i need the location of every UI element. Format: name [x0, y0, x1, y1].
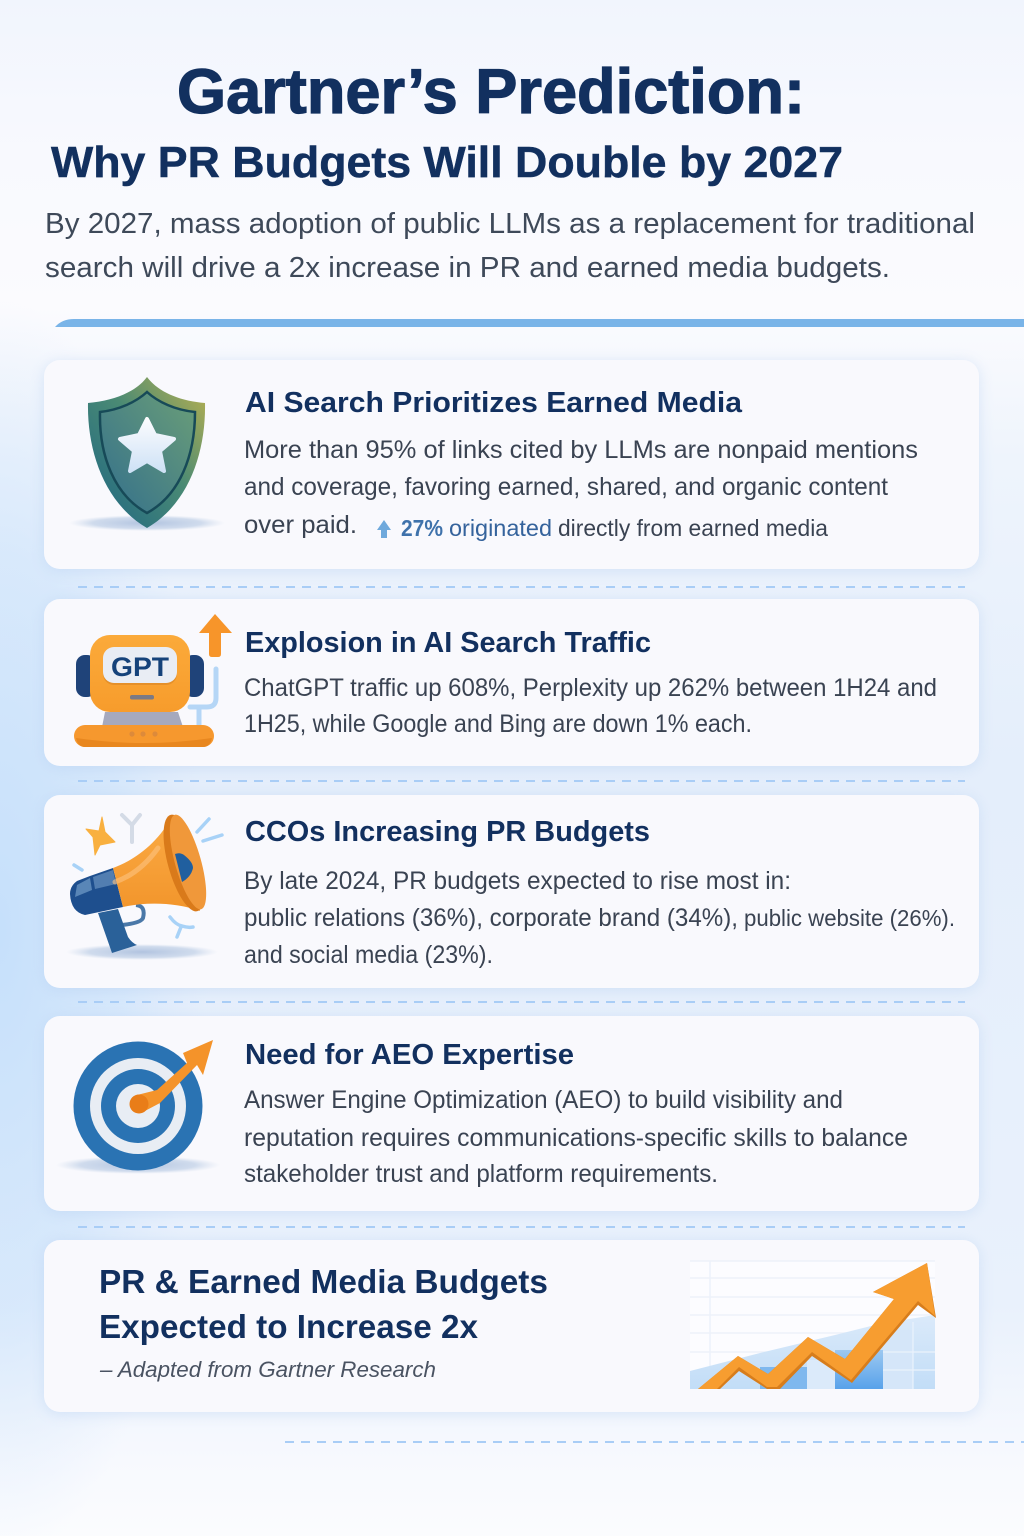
icon: GPT computer with up arrow — [74, 614, 232, 747]
icon: small up arrow — [377, 520, 391, 538]
body text — [244, 674, 937, 738]
statistic callout: 27% — [401, 515, 443, 541]
source attribution: – Adapted from Gartner Research — [99, 1357, 436, 1382]
icon: megaphone — [66, 811, 222, 960]
icon: target with arrow — [56, 1040, 220, 1174]
body text: stakeholder trust and platform requirements. — [244, 1160, 718, 1188]
card shadows — [44, 362, 979, 1414]
body text: public relations (36%), corporate brand (34%), — [244, 904, 738, 932]
blue header rule — [55, 319, 1024, 327]
dashed separators — [78, 587, 1024, 1442]
statistic callout: directly from earned media — [558, 515, 828, 541]
heading: Explosion in AI Search Traffic — [245, 627, 651, 659]
body text: More than 95% of links cited by LLMs are nonpaid mentions — [244, 436, 918, 464]
body text — [244, 1086, 908, 1188]
body text: and social media (23%). — [244, 941, 493, 969]
icon: shield with star — [69, 377, 225, 531]
panel: need for AEO expertise — [44, 1016, 979, 1211]
body text: 1H25, while Google and Bing are down 1% each. — [244, 710, 752, 738]
body text: public website (26%). — [744, 905, 955, 931]
heading: AI Search Prioritizes Earned Media — [245, 387, 743, 419]
panel: explosion in AI search traffic — [44, 599, 979, 766]
title: Gartner’s Prediction: — [177, 57, 805, 127]
panel: conclusion — [44, 1240, 979, 1412]
intro text: search will drive a 2x increase in PR and earned media budgets. — [45, 252, 890, 284]
body text — [244, 436, 918, 539]
body text: Answer Engine Optimization (AEO) to build visibility and — [244, 1086, 843, 1114]
panel: AI search prioritizes earned media — [44, 360, 979, 569]
body text — [244, 867, 955, 969]
heading: PR & Earned Media Budgets — [99, 1263, 548, 1300]
body text: over paid. — [244, 511, 357, 539]
subtitle: Why PR Budgets Will Double by 2027 — [51, 138, 843, 187]
panel: CCOs increasing PR budgets — [44, 795, 979, 988]
body text: and coverage, favoring earned, shared, and organic content — [244, 473, 888, 501]
body text: ChatGPT traffic up 608%, Perplexity up 262% between 1H24 and — [244, 674, 937, 702]
intro text: By 2027, mass adoption of public LLMs as a replacement for traditional — [45, 208, 975, 240]
statistic callout — [401, 515, 828, 541]
chart: rising growth arrow — [690, 1261, 936, 1389]
heading — [99, 1263, 548, 1345]
heading: CCOs Increasing PR Budgets — [245, 816, 650, 848]
body text: By late 2024, PR budgets expected to rise most in: — [244, 867, 791, 895]
heading: Expected to Increase 2x — [99, 1308, 479, 1345]
body text: reputation requires communications-specific skills to balance — [244, 1124, 908, 1152]
statistic callout: originated — [449, 515, 552, 541]
icon: GPT computer with up arrow: GPT — [111, 652, 170, 682]
intro text — [45, 208, 975, 284]
heading: Need for AEO Expertise — [245, 1039, 574, 1071]
